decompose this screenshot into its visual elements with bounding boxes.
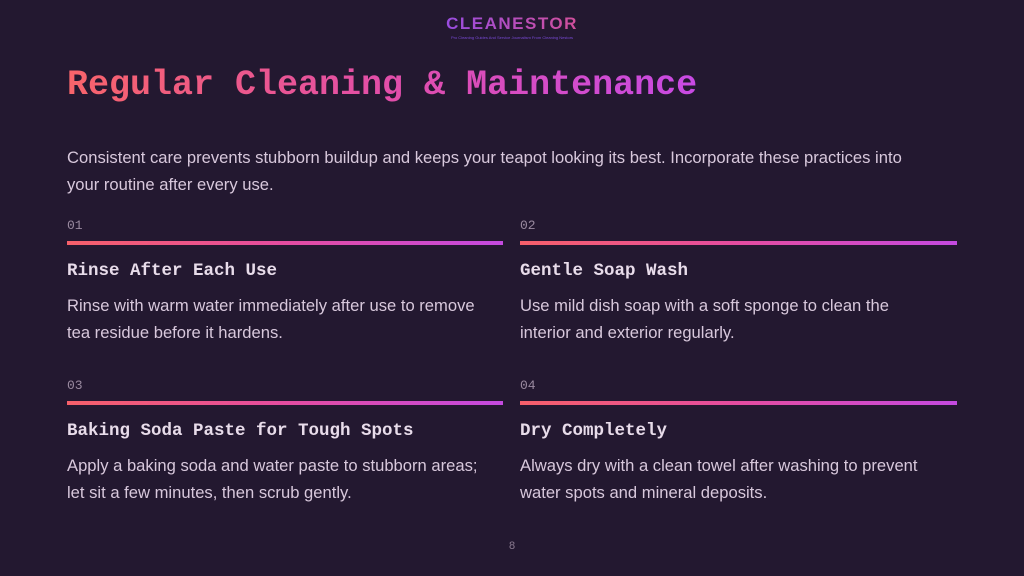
card 02: Use mild dish soap with a soft sponge to clean the interior and exterior regularly.: [520, 296, 889, 342]
card 03: [67, 378, 503, 502]
logo: CLEANESTOR: [446, 14, 578, 33]
intro text: Consistent care prevents stubborn buildup and keeps your teapot looking its best. Incorporate these practices into your routine after every use.: [67, 148, 902, 194]
card 03: Baking Soda Paste for Tough Spots: [67, 421, 414, 441]
card 01: Rinse After Each Use: [67, 261, 277, 281]
card 03: Apply a baking soda and water paste to stubborn areas; let sit a few minutes, then scrub gently.: [67, 456, 478, 502]
page number: 8: [509, 540, 515, 552]
card 02: Gentle Soap Wash: [520, 261, 688, 281]
card 01: 01: [67, 218, 83, 233]
card 01: Rinse with warm water immediately after use to remove tea residue before it hardens.: [67, 296, 475, 342]
logo: Pro Cleaning Guides And Service Journalism From Cleaning Nestors: [451, 35, 573, 40]
card 04: [520, 378, 957, 502]
title: Regular Cleaning & Maintenance: [67, 65, 697, 105]
card 01: [67, 218, 503, 342]
card 04: Always dry with a clean towel after washing to prevent water spots and mineral deposits.: [520, 456, 918, 502]
card 04: Dry Completely: [520, 421, 667, 441]
card 02: [520, 218, 957, 342]
card 03: 03: [67, 378, 83, 393]
card 02: 02: [520, 218, 536, 233]
card 04: 04: [520, 378, 536, 393]
